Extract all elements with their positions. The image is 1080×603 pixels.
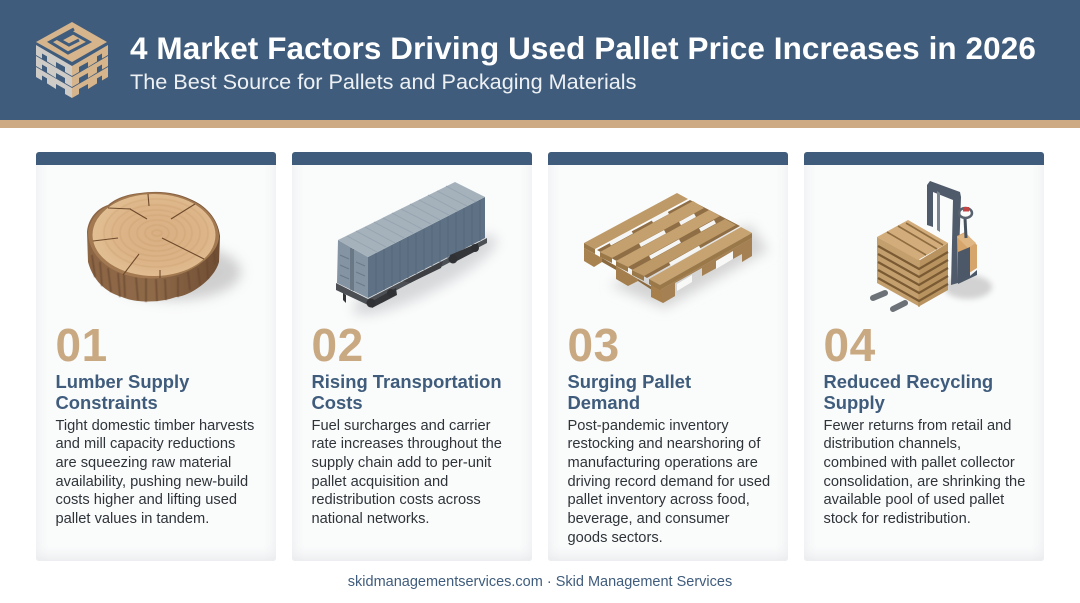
body text — [824, 418, 1025, 527]
number 01: 01 — [56, 319, 108, 371]
body text: and mill capacity reductions — [56, 436, 235, 452]
heading: Constraints — [56, 392, 158, 413]
body text — [56, 418, 254, 527]
heading — [568, 371, 691, 413]
body text: national networks. — [312, 511, 430, 527]
body text: goods sectors. — [568, 530, 663, 546]
number 02: 02 — [312, 319, 364, 371]
heading: Demand — [568, 392, 640, 413]
header band — [0, 0, 1080, 128]
heading — [56, 371, 190, 413]
body text: redistribution costs across — [312, 492, 481, 508]
heading — [312, 371, 502, 413]
body text: pallet acquisition and — [312, 474, 448, 490]
body text: availability, pushing new-build — [56, 474, 248, 490]
heading: Reduced Recycling — [824, 371, 993, 392]
body text: Fewer returns from retail and — [824, 418, 1011, 434]
panel: surging pallet demand — [548, 152, 788, 561]
panel: reduced recycling supply — [804, 152, 1044, 561]
body text: Tight domestic timber harvests — [56, 418, 254, 434]
icon: wooden pallet — [584, 193, 768, 308]
body text: costs higher and lifting used — [56, 492, 237, 508]
icon: rail freight container — [336, 182, 504, 327]
panel: lumber supply constraints — [36, 152, 276, 561]
body text: pallet inventory across food, — [568, 492, 750, 508]
logo — [36, 22, 108, 98]
body text: available pool of used pallet — [824, 492, 1004, 508]
body text: stock for redistribution. — [824, 511, 971, 527]
body text: consolidation, are shrinking the — [824, 474, 1025, 490]
title: 4 Market Factors Driving Used Pallet Price Increases in 2026 — [130, 31, 1036, 66]
body text: Fuel surcharges and carrier — [312, 418, 491, 434]
heading: Surging Pallet — [568, 371, 691, 392]
subtitle: The Best Source for Pallets and Packaging Materials — [130, 69, 636, 94]
heading: Costs — [312, 392, 363, 413]
heading: Lumber Supply — [56, 371, 189, 392]
body text: restocking and nearshoring of — [568, 436, 760, 452]
footer: skidmanagementservices.com · Skid Management Services — [348, 574, 732, 590]
body text: pallet values in tandem. — [56, 511, 209, 527]
body text: Post-pandemic inventory — [568, 418, 729, 434]
heading: Supply — [824, 392, 885, 413]
body text: manufacturing operations are — [568, 455, 758, 471]
body text: are squeezing raw material — [56, 455, 231, 471]
body text — [312, 418, 502, 527]
body text: rate increases throughout the — [312, 436, 502, 452]
number 03: 03 — [568, 319, 620, 371]
body text: driving record demand for used — [568, 474, 770, 490]
panel: rising transportation costs — [292, 152, 532, 561]
number 04: 04 — [824, 319, 876, 371]
body text: combined with pallet collector — [824, 455, 1015, 471]
body text: distribution channels, — [824, 436, 961, 452]
body text — [568, 418, 770, 546]
heading: Rising Transportation — [312, 371, 502, 392]
icon: pallet stack with forklift — [873, 181, 992, 309]
heading — [824, 371, 993, 413]
body text: supply chain add to per-unit — [312, 455, 491, 471]
body text: beverage, and consumer — [568, 511, 729, 527]
